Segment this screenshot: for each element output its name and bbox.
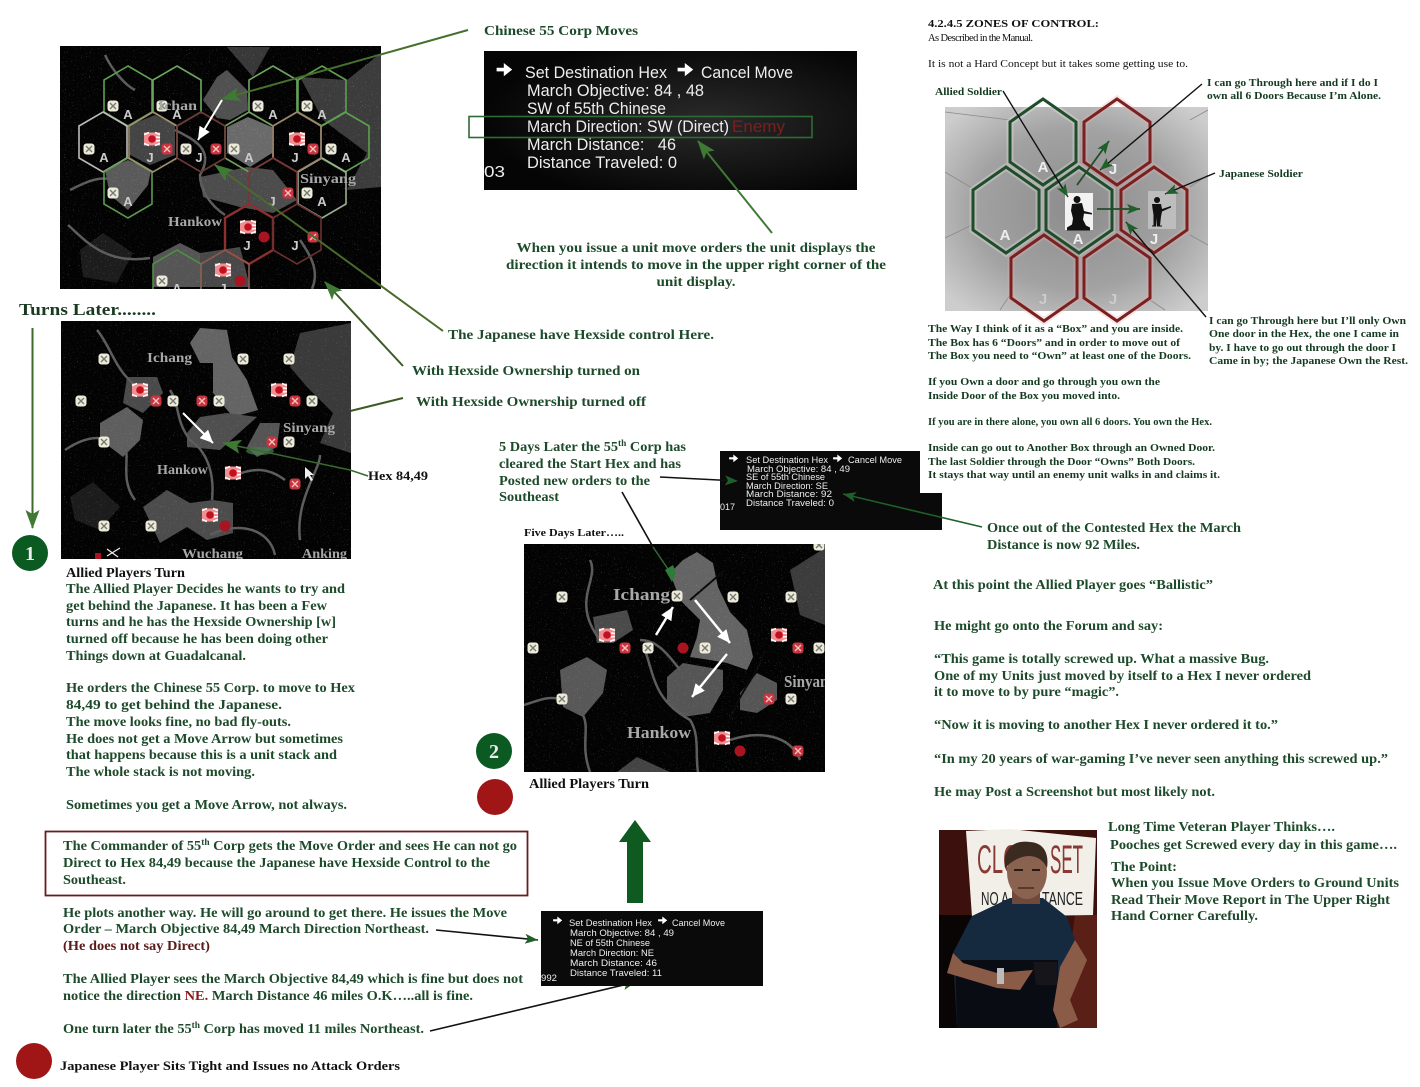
badge 1: 1 [25, 543, 35, 565]
text block: He plots another way: The Allied Player sees the March Objective 84,49 which is fine but does not [63, 971, 523, 986]
unit display 2 [720, 451, 942, 530]
speckle noise [524, 544, 825, 772]
display text: Distance Traveled: 0 [527, 153, 677, 172]
badge 1 [12, 535, 48, 571]
hex ownership letters: A [172, 107, 182, 122]
text block: box and doors analogy [928, 323, 1220, 481]
arrow: 5 days to map [622, 492, 653, 547]
text block: Allied Players Turn: 84,49 to get behind the Japanese. [66, 697, 282, 712]
text block: He plots another way: (He does not say Direct) [63, 938, 210, 954]
arrow: 11 miles to unit display [430, 982, 636, 1031]
hex letters: J [1109, 161, 1117, 178]
icon: arrows [729, 454, 842, 462]
hex ownership letters: J [243, 238, 251, 253]
hex ownership letters [99, 107, 351, 296]
display text: Distance Traveled: 0 [746, 498, 834, 509]
text block: box and doors analogy: If you are in there alone, you own all 6 doors. You own the Hex. [928, 417, 1212, 428]
callout: go through here: own all 6 Doors Because I’m Alone. [1207, 90, 1381, 102]
right wall [1060, 915, 1097, 1028]
sign [966, 829, 1096, 917]
hex marker patch [246, 447, 274, 455]
text block: box and doors analogy: The Way I think of it as a “Box” and you are inside. [928, 323, 1183, 335]
icon: arrows [497, 63, 693, 76]
text block: box and doors analogy: It stays that way until an enemy unit walks in and claims it. [928, 469, 1220, 481]
hex ownership letters: J [291, 150, 299, 165]
text block: He plots another way: He plots another way. He will go around to get there. He issues the Move [63, 905, 507, 920]
red turn marker bottom [16, 1043, 52, 1079]
unit move arrow [198, 100, 222, 140]
city labels: Anking [302, 547, 347, 562]
icon: mouse cursor [305, 467, 314, 481]
hex ownership letters: J [268, 194, 276, 209]
speckle noise [60, 46, 381, 289]
text: 5 Days Later [499, 438, 687, 504]
display text: Cancel Move [848, 455, 902, 466]
city labels [158, 99, 356, 230]
text block: Allied Players Turn: Things down at Guadalcanal. [66, 648, 246, 663]
display text: March Distance: 46 [570, 958, 657, 969]
arrow to March Direction [698, 141, 772, 233]
display text [720, 455, 902, 513]
man: left arm and hand [947, 953, 1033, 990]
sign: SET [1050, 838, 1083, 882]
text: The Point: When you Issue Move Orders to Ground Units [1111, 875, 1400, 890]
arrow: go through here [1100, 84, 1202, 170]
callout: Once out of the contested hex: Once out of the Contested Hex the March [987, 520, 1241, 535]
display text: March Objective: 84 , 49 [570, 928, 674, 939]
red turn marker [477, 779, 513, 815]
text block: Allied player goes ballistic: At this point the Allied Player goes “Ballistic” [933, 577, 1213, 592]
display text: Set Destination Hex [525, 63, 667, 82]
text block: Allied Players Turn: The whole stack is not moving. [66, 764, 255, 779]
text block: Allied Players Turn: turned off because he has been doing other [66, 631, 328, 646]
highlight box: March Direction [469, 116, 812, 138]
text block: Allied Players Turn: Allied Players Turn [66, 565, 185, 580]
arrow: hexside ownership off [330, 398, 403, 416]
hexside grid [79, 66, 369, 310]
display text: March Distance: 46 [527, 135, 676, 154]
text block: Allied player goes ballistic: “This game is totally screwed up. What a massive Bug. [934, 651, 1269, 666]
label: Allied Players Turn: Allied Players Turn [529, 776, 649, 791]
display text: NE of 55th Chinese [570, 938, 650, 949]
city labels: Sinyang [784, 672, 836, 691]
text block: Allied player goes ballistic [933, 577, 1388, 799]
city labels [147, 351, 347, 562]
text block: box and doors analogy: The Box has 6 “Doors” and in order to move out of [928, 337, 1180, 349]
watch [997, 968, 1004, 984]
text block: box and doors analogy: Inside can go out to Another Box through an Owned Door. [928, 442, 1215, 454]
text block: Allied player goes ballistic: it to move to by pure “magic”. [934, 684, 1119, 699]
city labels: Ichan [158, 99, 197, 114]
city labels: Ichang [147, 351, 192, 366]
text block: Allied Players Turn: get behind the Japanese. It has been a Few [66, 598, 327, 613]
hex ownership letters: J [291, 238, 299, 253]
hex letters: A [1073, 231, 1084, 248]
callout: only own one door [1209, 315, 1408, 367]
hex letters: A [1000, 227, 1011, 244]
hex letters: J [1039, 291, 1047, 308]
callout: only own one door: Came in by; the Japanese Own the Rest. [1209, 355, 1408, 367]
text block: Allied Players Turn: The Allied Player Decides he wants to try and [66, 581, 345, 596]
text: The Point [1111, 859, 1400, 923]
rivers [68, 55, 315, 289]
arrow: move up-right [1077, 141, 1109, 185]
display text: Distance Traveled: 11 [570, 968, 662, 979]
heading: Zones of Control [928, 18, 1188, 70]
man: right arm and hand [1053, 940, 1087, 1028]
text: Long Time Veteran Player Thinks: Long Time Veteran Player Thinks…. [1108, 819, 1335, 834]
badge 2: 2 [489, 741, 499, 763]
display text [541, 918, 725, 984]
arrow: Allied Soldier [1003, 91, 1068, 197]
callout box: Commander of 55th Corp: Direct to Hex 84,49 because the Japanese have Hexside Control to the [63, 855, 490, 870]
callout box: Commander of 55th Corp: Southeast. [63, 872, 126, 887]
icon: Japanese soldier [1148, 191, 1176, 229]
man: head [1005, 842, 1047, 904]
hex ownership letters: A [123, 107, 133, 122]
callout box: Commander of 55th Corp: The Commander of 55 [63, 838, 196, 853]
text: The Point: Hand Corner Carefully. [1111, 908, 1258, 923]
heading: Zones of Control: As Described in the Manual. [928, 33, 1033, 44]
display text: March Distance: 92 [746, 489, 832, 500]
text block: Allied player goes ballistic: “Now it is moving to another Hex I never ordered it to.” [934, 717, 1278, 732]
arrow: Once out to display [843, 494, 982, 527]
arrow: Chinese 55 Corp to map [222, 30, 468, 99]
arrow: hexside ownership on [325, 282, 403, 366]
hex letters [1000, 159, 1158, 308]
text: The Point: The Point: [1111, 859, 1177, 874]
arrow: go through but own one door [1126, 222, 1206, 317]
sign: TANCE [1042, 889, 1083, 909]
city labels: Hankow [627, 723, 692, 742]
callout: hexside ownership on: With Hexside Ownership turned on [412, 363, 640, 378]
arrow: move right [1097, 208, 1140, 210]
heading: Zones of Control: It is not a Hard Concept but it takes some getting use to. [928, 58, 1188, 70]
label: Five Days Later: Five Days Later….. [524, 527, 624, 539]
icon: arrows [553, 916, 667, 924]
hex ownership letters: J [219, 281, 227, 296]
hex ownership letters: A [172, 281, 182, 296]
move arrows [656, 600, 730, 697]
display text: March Direction: SE [746, 481, 828, 492]
arrow: Turns Later down [32, 328, 34, 528]
mug [1033, 962, 1057, 985]
text block: He plots another way [63, 905, 523, 1036]
display text: Cancel Move [701, 63, 793, 82]
city labels: Hankow [168, 215, 223, 230]
terrain [70, 323, 351, 543]
terrain [560, 548, 825, 772]
hex ownership letters: A [99, 150, 109, 165]
heading: Zones of Control: 4.2.4.5 ZONES OF CONTROL: [928, 18, 1099, 30]
map 1: hexside ownership turned on [60, 46, 381, 310]
display text: SE of 55th Chinese [746, 472, 825, 483]
text: 5 Days Later: Southeast [499, 489, 559, 504]
hex diagram: allied and Japanese soldiers [945, 99, 1208, 321]
city labels: Ichang [613, 585, 671, 604]
photo: man with mug [939, 829, 1097, 1028]
label: Allied Soldier: Allied Soldier [935, 86, 1002, 98]
hex ownership letters: J [146, 150, 154, 165]
arrow: Japanese Soldier [1165, 173, 1215, 194]
text: unit move orders explanation: When you issue a unit move orders the unit displays the [516, 240, 876, 255]
big up arrow [619, 820, 651, 903]
unit markers [528, 540, 824, 756]
move arrow [183, 413, 213, 443]
text block: Allied player goes ballistic: He might go onto the Forum and say: [934, 618, 1163, 633]
heading: Turns Later: Turns Later........ [19, 300, 156, 319]
text block: Allied Players Turn: He orders the Chinese 55 Corp. to move to Hex [66, 680, 355, 695]
display text: March Direction: NE [570, 948, 654, 959]
terrain [80, 47, 381, 287]
callout: Japanese hexside control: The Japanese have Hexside control Here. [448, 327, 714, 342]
hex halos [973, 99, 1187, 321]
text: 5 Days Later: Posted new orders to the [499, 473, 650, 488]
city labels: Sinyang [283, 421, 335, 436]
text block: He plots another way: notice the direction NE. March Distance 46 miles O.K…..all is fine. [63, 988, 473, 1003]
text block: He plots another way: th [192, 1020, 200, 1030]
text block: Allied player goes ballistic: One of my Units just moved by itself to a Hex I never ordered [934, 668, 1311, 683]
hex ownership letters: A [341, 150, 351, 165]
hex ownership letters: A [123, 194, 133, 209]
map 2: hexside ownership turned off [61, 321, 351, 562]
hex letters: J [1109, 291, 1117, 308]
text: 5 Days Later: th [618, 438, 626, 448]
text block: He plots another way: One turn later the 55 [63, 1021, 187, 1036]
small scissors marker [95, 548, 120, 559]
display text: Cancel Move [672, 918, 725, 929]
text block: He plots another way: Order – March Objective 84,49 March Direction Northeast. [63, 921, 429, 936]
text block: box and doors analogy: The Box you need to “Own” at least one of the Doors. [928, 350, 1191, 362]
red hexes [1011, 99, 1187, 321]
display text: 017 [720, 502, 735, 513]
text block: Allied Players Turn: Sometimes you get a Move Arrow, not always. [66, 797, 347, 812]
label: Japanese Soldier: Japanese Soldier [1219, 168, 1303, 180]
man: shirt [953, 898, 1075, 1028]
display text: Set Destination Hex [746, 455, 828, 466]
green leader and marker [653, 547, 676, 582]
text block: Allied Players Turn: turns and he has the Hexside Ownership [w] [66, 614, 336, 629]
text block: box and doors analogy: If you Own a door and go through you own the [928, 376, 1160, 388]
callout: go through here: I can go Through here and if I do I [1207, 77, 1378, 89]
callout: go through here [1207, 77, 1381, 102]
hex ownership letters: A [244, 150, 254, 165]
text block: box and doors analogy: The last Soldier through the Door “Owns” Both Doors. [928, 456, 1195, 468]
city labels: Hankow [157, 463, 209, 478]
text: unit move orders explanation [506, 240, 886, 289]
display text: March Objective: 84 , 48 [527, 81, 704, 100]
dark river through terrain [690, 576, 754, 700]
arrow: plots to unit display [436, 930, 538, 940]
text: 5 Days Later: 5 Days Later the 55 [499, 439, 614, 454]
callout: only own one door: by. I have to go out through the door I [1209, 342, 1396, 354]
sign: CLO [977, 838, 1019, 882]
display text: March Objective: 84 , 49 [747, 464, 850, 475]
city labels: Sinyang [300, 172, 356, 187]
badge 2 [476, 733, 512, 769]
rivers [524, 560, 800, 772]
hex ownership letters: J [195, 150, 203, 165]
text block: Allied Players Turn: The move looks fine, no bad fly-outs. [66, 714, 291, 729]
text block: Allied player goes ballistic: He may Post a Screenshot but most likely not. [934, 784, 1215, 799]
text: 5 Days Later: cleared the Start Hex and has [499, 456, 682, 471]
man: lower shirt shadow [955, 960, 1058, 1028]
speckle noise [61, 321, 351, 559]
icon: allied soldier [1065, 193, 1093, 230]
text: 5 Days Later: Corp has [626, 439, 687, 454]
callout box: Commander of 55th Corp: th [201, 837, 210, 847]
text block: box and doors analogy: Inside Door of the Box you moved into. [928, 390, 1120, 402]
text block: He plots another way: Corp has moved 11 miles Northeast. [200, 1021, 424, 1036]
callout: Once out of the contested hex [987, 520, 1241, 552]
text: Japanese player: Japanese Player Sits Tight and Issues no Attack Orders [60, 1058, 400, 1073]
text: The Point: Read Their Move Report in The Upper Right [1111, 892, 1390, 907]
display text: SW of 55th Chinese [527, 99, 666, 118]
arrow: 5 days to display [660, 477, 738, 481]
text block: Allied Players Turn: that happens because this is a unit stack and [66, 747, 337, 762]
display text: March Direction: SW (Direct) [527, 117, 729, 136]
callout: hexside ownership off: With Hexside Ownership turned off [416, 394, 646, 409]
hex ownership letters: A [317, 107, 327, 122]
green hexes [973, 99, 1112, 253]
text: unit move orders explanation: direction it intends to move in the upper right corner of the [506, 257, 886, 272]
display text: 992 [541, 973, 557, 984]
heading: Chinese 55 Corp Moves: Chinese 55 Corp Moves [484, 23, 639, 38]
unit markers [76, 354, 318, 532]
text block: Allied player goes ballistic: “In my 20 years of war-gaming I’ve never seen anything this screwed up.” [934, 751, 1388, 766]
text block: Allied Players Turn [66, 565, 355, 812]
map 3: five days later [524, 540, 836, 772]
callout box: Commander of 55th Corp: Corp gets the Move Order and sees He can not go [210, 838, 517, 853]
unit display 3 [541, 911, 763, 986]
text: Long Time Veteran Player Thinks [1108, 819, 1397, 852]
display text: Set Destination Hex [569, 918, 652, 929]
display text: Enemy [732, 117, 785, 136]
unit markers [84, 100, 336, 286]
callout: Once out of the contested hex: Distance is now 92 Miles. [987, 537, 1140, 552]
display text [484, 63, 793, 181]
faint hex grid [945, 110, 1208, 310]
callout box: Commander of 55th Corp [46, 832, 528, 896]
hex ownership letters: A [317, 194, 327, 209]
city labels: Wuchang [182, 547, 243, 562]
callout: only own one door: One door in the Hex, the one I came in [1209, 328, 1399, 340]
hex ownership letters: A [268, 107, 278, 122]
hex letters: J [1150, 231, 1158, 248]
text: Long Time Veteran Player Thinks: Pooches get Screwed every day in this game…. [1110, 837, 1397, 852]
callout: only own one door: I can go Through here but I’ll only Own [1209, 315, 1406, 327]
arrow: Japanese hexside control [215, 165, 443, 331]
text block: Allied Players Turn: He does not get a Move Arrow but sometimes [66, 731, 344, 746]
display text: 03 [484, 164, 505, 181]
text: unit move orders explanation: unit display. [656, 274, 736, 289]
hex letters: A [1038, 159, 1049, 176]
label: Hex 84,49: Hex 84,49 [368, 468, 429, 483]
city labels [613, 585, 836, 742]
unit display 1 [484, 51, 857, 190]
arrow: Hex 84,49 leader [223, 443, 368, 476]
shadow side of wall [939, 915, 979, 1028]
sign: NO A [981, 889, 1009, 909]
rivers [65, 330, 320, 555]
